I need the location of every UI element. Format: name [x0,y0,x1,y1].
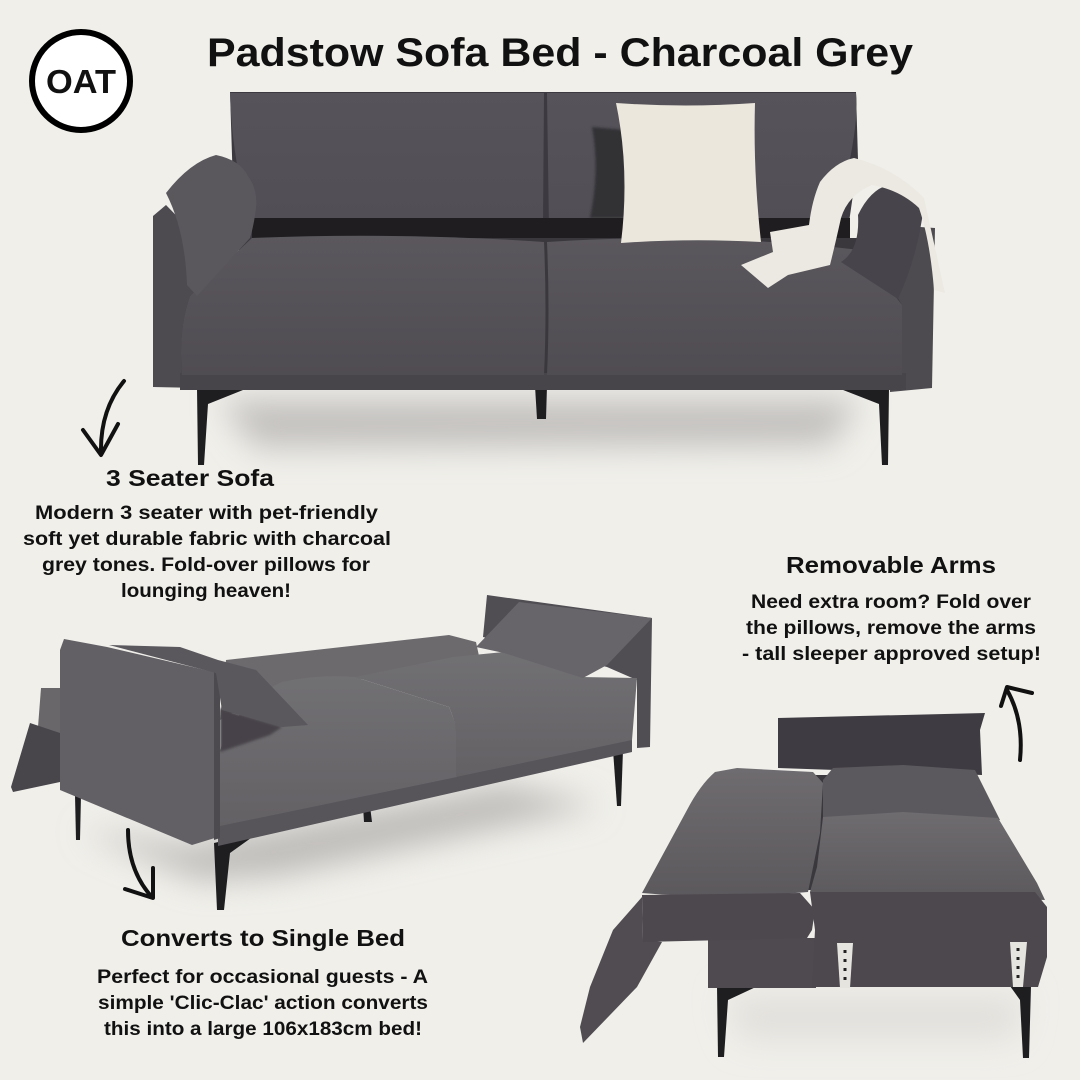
text block: converts to single bed: simple 'Clic-Clac' action converts [98,993,428,1014]
text block: converts to single bed: Converts to Single Bed [121,925,405,951]
text block: removable arms: the pillows, remove the arms [746,618,1036,639]
logo: OAT [32,32,130,130]
text block: converts to single bed [97,925,428,1040]
title: Padstow Sofa Bed - Charcoal Grey [207,31,914,75]
arrow: to 3 seater sofa [83,381,124,455]
sofa: angled side view [11,595,652,910]
text block: removable arms [742,552,1041,665]
text block: 3 seater sofa: 3 Seater Sofa [106,465,274,491]
text block: removable arms: Removable Arms [786,552,996,578]
text block: 3 seater sofa: Modern 3 seater with pet-friendly [35,503,378,524]
text block: 3 seater sofa: grey tones. Fold-over pillows for [42,555,371,576]
text block: converts to single bed: Perfect for occasional guests - A [97,967,428,988]
sofa: unfolded into bed [580,713,1047,1058]
text block: removable arms: Need extra room? Fold over [751,592,1032,613]
text block: 3 seater sofa: lounging heaven! [121,581,291,602]
logo: OAT: OAT [46,63,116,100]
text block: 3 seater sofa [23,465,391,602]
text block: converts to single bed: this into a large 106x183cm bed! [104,1019,422,1040]
arrow: to single bed [125,830,153,898]
arrow: to removable arms [1001,687,1032,760]
text block: 3 seater sofa: soft yet durable fabric with charcoal [23,529,391,550]
sofa: upright three seater [153,92,945,465]
text block: removable arms: - tall sleeper approved setup! [742,644,1041,665]
